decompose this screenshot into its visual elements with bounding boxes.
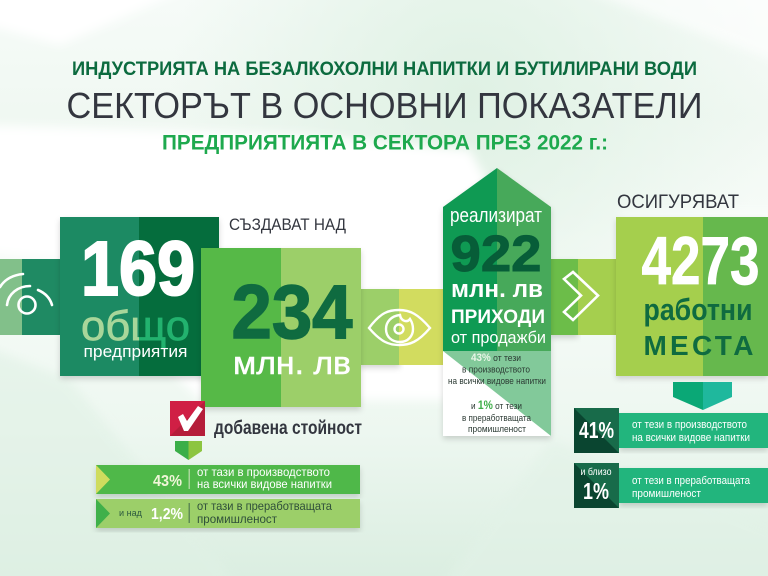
- panel: 922 million revenue: [443, 168, 551, 436]
- note: 43% and 1%: и 1% от тези: [471, 398, 522, 412]
- title: industry: ИНДУСТРИЯТА НА БЕЗАЛКОХОЛНИ НАПИТКИ И БУТИЛИРАНИ ВОДИ: [72, 59, 697, 80]
- bar: 43% value added: 43%: [153, 473, 182, 490]
- note: 43% and 1%: в производството: [462, 364, 530, 376]
- number 234: 234: [232, 270, 352, 355]
- badge: 1%: [574, 463, 619, 508]
- number 169: 169: [81, 226, 195, 312]
- title: main heading: СЕКТОРЪТ В ОСНОВНИ ПОКАЗАТЕЛИ: [66, 85, 702, 126]
- label: места: МЕСТА: [644, 330, 754, 361]
- bar: 1.2% value added: [96, 499, 360, 528]
- note: 43% and 1%: промишленост: [468, 424, 527, 435]
- badge: 41%: 41%: [579, 417, 614, 443]
- connector band with chevron icon: [551, 259, 618, 335]
- note: 43% and 1%: [448, 352, 546, 435]
- icon: chevron: [564, 272, 598, 320]
- bar: 1% jobs: промишленост: [632, 488, 701, 500]
- bar: 41% jobs: [574, 408, 768, 453]
- panel: 234 million: [201, 248, 361, 407]
- label: общо: общо: [81, 302, 190, 349]
- arrow: teal down: [673, 382, 732, 410]
- bar: 43% value added: на всички видове напитки: [197, 477, 332, 491]
- bar: 41% jobs: от тези в производството: [632, 419, 747, 431]
- bar: 43% value added: [96, 465, 360, 494]
- label: реализират: реализират: [450, 205, 542, 227]
- panel: 4273 jobs: [616, 217, 768, 376]
- label: млн. лв: млн. лв: [451, 276, 543, 303]
- bar: 1% jobs: [574, 463, 768, 508]
- left connector band with signal icon: [0, 259, 62, 335]
- bar: 1.2% value added: 1,2%: [151, 506, 183, 523]
- label: от продажби: от продажби: [451, 328, 546, 347]
- icon: eye: [369, 310, 430, 345]
- note: 43% and 1%: на всички видове напитки: [448, 376, 546, 387]
- panel: 169 enterprises: [60, 217, 219, 376]
- label: предприятия: предприятия: [84, 343, 188, 361]
- badge: 1%: 1%: [583, 478, 609, 504]
- bar: 1.2% value added: от тази в преработващата: [197, 499, 332, 513]
- label: приходи: ПРИХОДИ: [451, 307, 545, 328]
- label: добавена стойност: добавена стойност: [214, 418, 362, 439]
- bar: 1.2% value added: и над: [119, 508, 143, 518]
- label: осигуряват: ОСИГУРЯВАТ: [617, 192, 739, 213]
- arrow: green shield: [175, 441, 202, 460]
- label: създават над: СЪЗДАВАТ НАД: [229, 215, 346, 234]
- label: работни: работни: [644, 292, 752, 327]
- bar: 1.2% value added: промишленост: [197, 512, 277, 526]
- subtitle: ПРЕДПРИЯТИЯТА В СЕКТОРА ПРЕЗ 2022 г.:: [162, 132, 608, 154]
- badge: 41%: [574, 408, 619, 453]
- badge: 1%: и близо: [580, 466, 612, 478]
- bar: 41% jobs: на всички видове напитки: [632, 432, 750, 444]
- note: 43% and 1%: 43% от тези: [471, 352, 521, 364]
- icon: signal circle: [0, 274, 52, 314]
- icon: red check mark: [170, 401, 205, 436]
- connector band with eye icon: [360, 289, 443, 365]
- number 922: 922: [450, 225, 542, 282]
- bar: 43% value added: от тази в производството: [197, 465, 330, 479]
- bar: 1% jobs: от тези в преработващата: [632, 475, 751, 487]
- note: 43% and 1%: в преработващата: [462, 413, 532, 424]
- label: млн. лв: млн. лв: [233, 345, 351, 381]
